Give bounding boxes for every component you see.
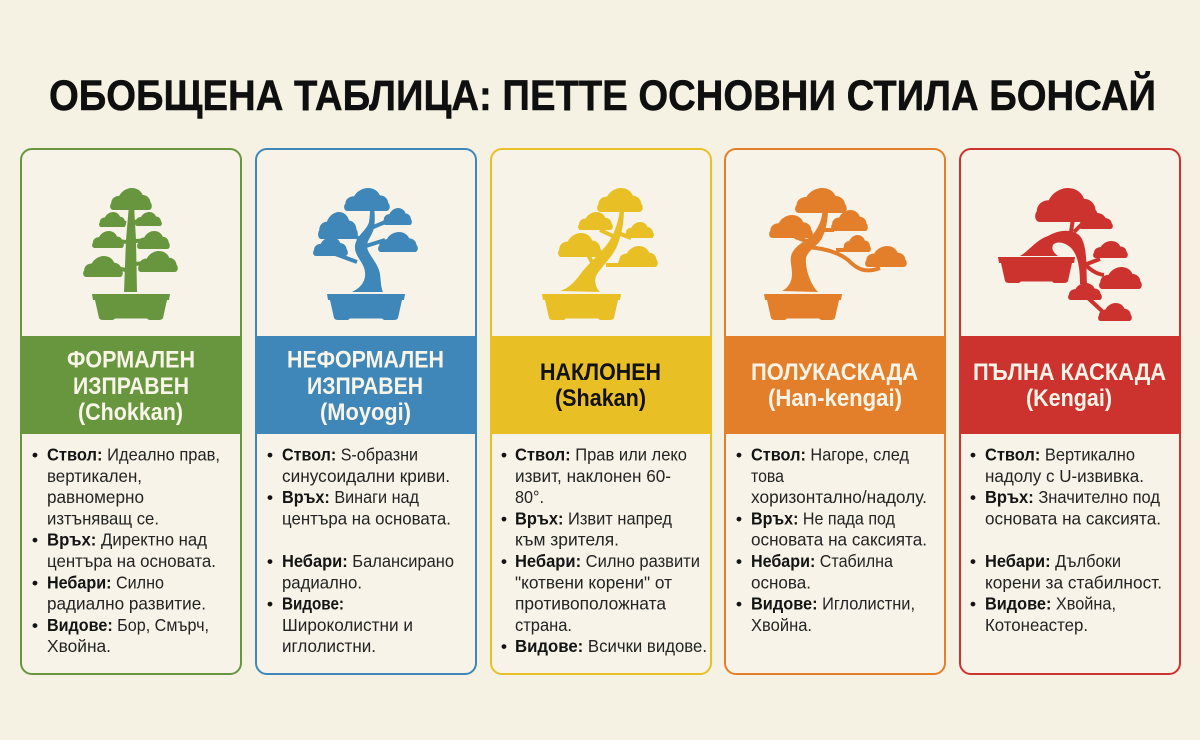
text block: full cascade traits: •: [970, 446, 976, 464]
text block: semi-cascade traits: Хвойна.: [751, 615, 812, 635]
text block: full cascade traits: корени за стабилност.: [985, 572, 1162, 592]
text block: full cascade traits: Ствол: Вертикално: [985, 444, 1135, 464]
text block: full cascade traits: Връх: Значително под: [985, 487, 1160, 507]
text block: slanting traits: [501, 444, 707, 656]
text block: slanting traits: Видове: Всички видове.: [515, 636, 707, 656]
text block: formal upright traits: Хвойна.: [47, 636, 111, 656]
text block: informal upright traits: синусоидални криви.: [282, 466, 450, 486]
text block: full cascade traits: основата на саксията.: [985, 508, 1161, 528]
text block: formal upright traits: Ствол: Идеално прав,: [47, 444, 220, 464]
text block: slanting traits: към зрителя.: [515, 530, 619, 550]
text block: semi-cascade traits: •: [736, 446, 742, 464]
panel: informal upright: [256, 149, 476, 674]
text block: informal upright traits: Видове:: [282, 594, 344, 614]
panel: formal upright: [21, 149, 241, 674]
text block: formal upright traits: [32, 444, 220, 656]
heading band: formal upright: (Chokkan): [78, 399, 183, 426]
text block: semi-cascade traits: •: [736, 509, 742, 528]
text block: formal upright traits: изтъняващ се.: [47, 508, 159, 528]
heading band: semi-cascade: ПОЛУКАСКАДА: [751, 359, 918, 386]
text block: informal upright traits: радиално.: [282, 572, 362, 592]
text block: informal upright traits: Широколистни и: [282, 615, 413, 635]
text block: informal upright traits: •: [267, 488, 273, 507]
heading band: formal upright: ИЗПРАВЕН: [73, 373, 189, 400]
text block: slanting traits: •: [501, 509, 507, 528]
text block: informal upright traits: Връх: Винаги над: [282, 487, 419, 507]
text block: full cascade traits: Небари: Дълбоки: [985, 551, 1121, 571]
heading band: full cascade: ПЪЛНА КАСКАДА: [973, 359, 1166, 386]
heading band: informal upright: НЕФОРМАЛЕН: [287, 346, 444, 374]
text block: slanting traits: извит, наклонен 60-: [515, 466, 671, 486]
text block: full cascade traits: •: [970, 595, 976, 614]
heading band: formal upright: [21, 336, 241, 434]
text block: informal upright traits: Небари: Балансирано: [282, 551, 454, 571]
text block: informal upright traits: •: [267, 446, 273, 464]
text block: formal upright traits: •: [32, 446, 38, 464]
heading band: slanting: [491, 336, 711, 434]
text block: semi-cascade traits: •: [736, 552, 742, 571]
panel: semi-cascade: [725, 149, 945, 674]
text block: semi-cascade traits: основата на саксията.: [751, 530, 927, 550]
heading band: formal upright: ФОРМАЛЕН: [67, 346, 195, 374]
text block: semi-cascade traits: [736, 444, 927, 635]
icon: semi-cascade bonsai: [764, 188, 907, 320]
text block: formal upright traits: •: [32, 616, 38, 635]
text block: full cascade traits: [970, 444, 1162, 635]
text block: semi-cascade traits: Небари: Стабилна: [751, 551, 893, 571]
text block: formal upright traits: Връх: Директно над: [47, 530, 207, 550]
text block: informal upright traits: иглолистни.: [282, 636, 376, 656]
text block: formal upright traits: центъра на основата.: [47, 551, 216, 571]
text block: full cascade traits: •: [970, 552, 976, 571]
icon: full cascade bonsai: [998, 188, 1142, 321]
text block: semi-cascade traits: Ствол: Нагоре, след: [751, 444, 909, 464]
text block: formal upright traits: Видове: Бор, Смърч,: [47, 615, 209, 635]
text block: slanting traits: •: [501, 552, 507, 571]
heading band: full cascade: [960, 336, 1180, 434]
text block: semi-cascade traits: •: [736, 595, 742, 614]
text block: informal upright traits: [267, 444, 454, 656]
text block: formal upright traits: Небари: Силно: [47, 572, 164, 592]
panel: slanting: [491, 149, 711, 674]
text block: informal upright traits: центъра на основата.: [282, 508, 451, 528]
icon: slanting bonsai: [542, 188, 658, 320]
heading band: informal upright: (Moyogi): [320, 399, 411, 426]
heading band: slanting: (Shakan): [555, 385, 646, 412]
heading band: informal upright: ИЗПРАВЕН: [307, 373, 423, 400]
text block: formal upright traits: •: [32, 531, 38, 550]
heading band: semi-cascade: (Han-kengai): [768, 385, 902, 412]
text block: full cascade traits: надолу с U-извивка.: [985, 466, 1144, 486]
text block: semi-cascade traits: Видове: Иглолистни,: [751, 594, 915, 614]
text block: formal upright traits: радиално развитие.: [47, 594, 206, 614]
text block: slanting traits: •: [501, 637, 507, 656]
heading band: informal upright: [256, 336, 476, 434]
text block: formal upright traits: равномерно: [47, 487, 144, 507]
text block: full cascade traits: •: [970, 488, 976, 507]
icon: formal upright bonsai: [83, 188, 178, 320]
panel: full cascade: [960, 149, 1180, 674]
text block: slanting traits: "котвени корени" от: [515, 572, 672, 592]
text block: semi-cascade traits: хоризонтално/надолу.: [751, 487, 927, 507]
text block: informal upright traits: •: [267, 552, 273, 571]
text block: slanting traits: противоположната: [515, 594, 666, 614]
text block: formal upright traits: •: [32, 573, 38, 592]
text block: informal upright traits: •: [267, 595, 273, 614]
text block: full cascade traits: Котонеастер.: [985, 615, 1088, 635]
heading band: semi-cascade: [725, 336, 945, 434]
icon: informal upright bonsai: [313, 188, 418, 320]
text block: slanting traits: страна.: [515, 615, 572, 635]
heading band: full cascade: (Kengai): [1026, 385, 1112, 412]
text block: slanting traits: Връх: Извит напред: [515, 508, 672, 528]
text block: slanting traits: 80°.: [515, 487, 544, 507]
heading band: slanting: НАКЛОНЕН: [540, 359, 661, 386]
text block: slanting traits: Ствол: Прав или леко: [515, 444, 687, 464]
text block: slanting traits: •: [501, 446, 507, 464]
text block: semi-cascade traits: основа.: [751, 572, 811, 592]
text block: full cascade traits: Видове: Хвойна,: [985, 594, 1116, 614]
text block: semi-cascade traits: Връх: Не пада под: [751, 508, 895, 528]
text block: slanting traits: Небари: Силно развити: [515, 551, 700, 571]
text block: semi-cascade traits: това: [751, 466, 784, 486]
text block: informal upright traits: Ствол: S-образни: [282, 444, 418, 464]
text block: formal upright traits: вертикален,: [47, 466, 142, 486]
